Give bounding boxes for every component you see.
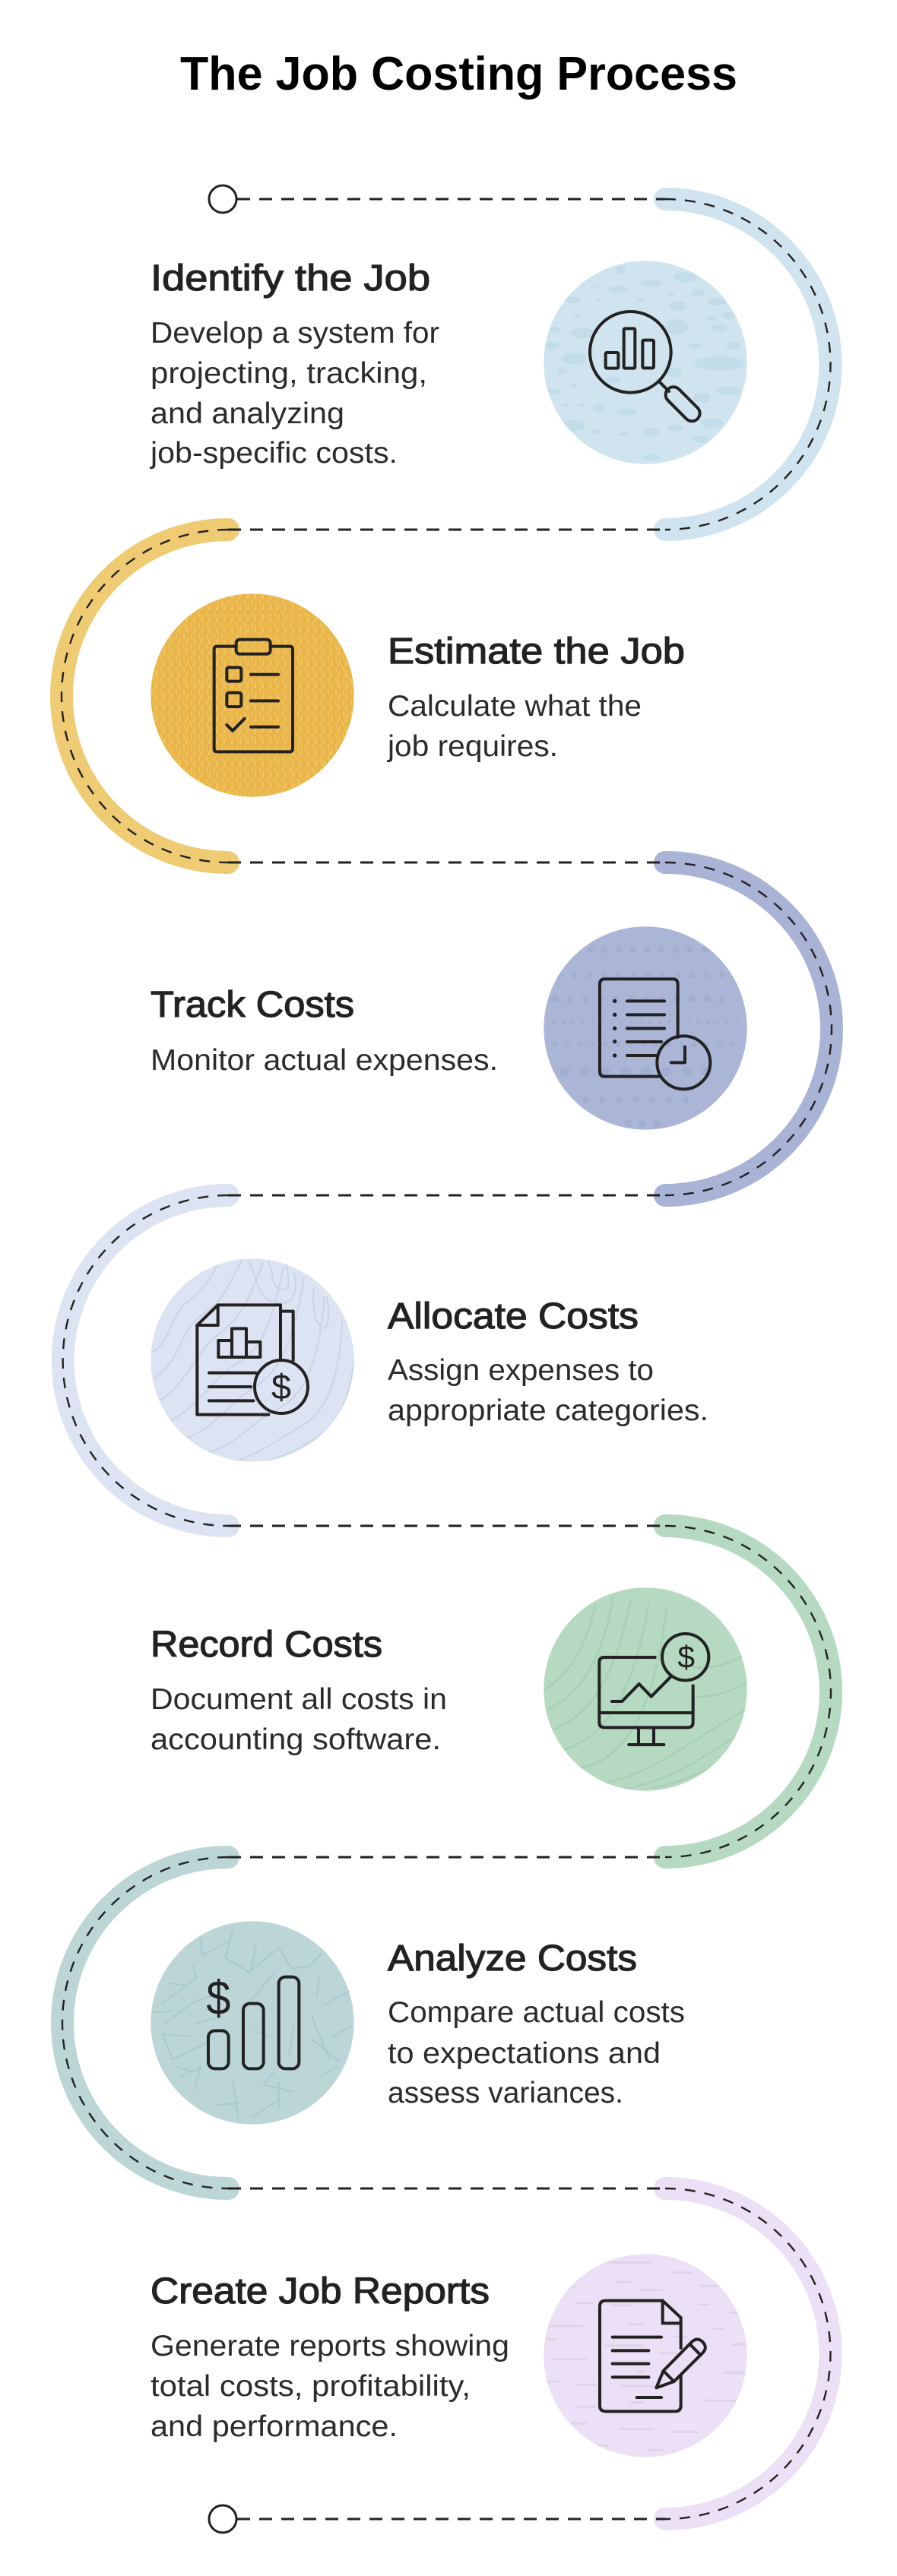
description: total costs, profitability, [151, 2370, 471, 2403]
heading: Record Costs [151, 1625, 382, 1665]
arc: step 3 connector [665, 862, 832, 1195]
description: projecting, tracking, [151, 357, 427, 390]
icon: report with dollar coin: $ [271, 1367, 291, 1407]
heading: Estimate the Job [388, 631, 685, 672]
icon: magnifier over bar chart [544, 261, 747, 464]
description: Develop a system for [151, 317, 439, 350]
panel: analyze costs [151, 1921, 685, 2125]
panel: identify the job [150, 258, 747, 470]
description [151, 2330, 509, 2443]
heading: Track Costs [151, 985, 354, 1025]
description [388, 1354, 708, 1427]
description [150, 317, 439, 470]
heading: Allocate Costs [388, 1296, 639, 1337]
icon: report with dollar coin [151, 1256, 355, 1464]
arc: step 2 connector [62, 530, 228, 862]
heading: Analyze Costs [388, 1938, 637, 1979]
description: job-specific costs. [150, 437, 398, 470]
arc: step 5 connector [665, 1526, 831, 1857]
icon: monitor with rising chart [544, 1587, 747, 1791]
description: assess variances. [388, 2077, 623, 2109]
dashed connector lines [228, 199, 665, 2519]
arc: step 7 connector [665, 2188, 830, 2519]
description: Generate reports showing [151, 2330, 509, 2362]
description [151, 1683, 447, 1756]
icon: document with clock [544, 926, 747, 1130]
heading: Create Job Reports [151, 2271, 490, 2312]
icon: dollar with bar chart [151, 1921, 354, 2125]
panel: record costs [151, 1587, 747, 1791]
icon: monitor with rising chart: $ [677, 1639, 695, 1674]
arc: step 6 connector [62, 1857, 228, 2188]
icon: dollar with bar chart: $ [206, 1972, 230, 2025]
description: and analyzing [151, 397, 344, 430]
panel: track costs [151, 926, 747, 1130]
start node [209, 185, 236, 213]
panel: estimate the job [151, 593, 685, 797]
description [387, 690, 642, 763]
description: job requires. [387, 730, 558, 763]
title: The Job Costing Process [180, 48, 737, 100]
icon: clipboard checklist [151, 593, 354, 797]
icon: document with pencil [544, 2254, 747, 2457]
description: Document all costs in [151, 1683, 447, 1716]
description: Calculate what the [388, 690, 642, 723]
description: Compare actual costs [388, 1996, 685, 2029]
end node [209, 2505, 236, 2533]
description: Assign expenses to [388, 1354, 654, 1387]
heading: Identify the Job [151, 258, 430, 299]
description [388, 1996, 685, 2109]
arc: step 4 connector [63, 1195, 228, 1526]
description: to expectations and [388, 2037, 661, 2070]
description: accounting software. [151, 1723, 441, 1756]
description: appropriate categories. [388, 1394, 708, 1427]
description: and performance. [151, 2410, 398, 2443]
panel: allocate costs [151, 1256, 708, 1464]
panel: create job reports [151, 2254, 747, 2457]
description: Monitor actual expenses. [151, 1044, 498, 1077]
arc: step 1 connector [665, 199, 830, 530]
